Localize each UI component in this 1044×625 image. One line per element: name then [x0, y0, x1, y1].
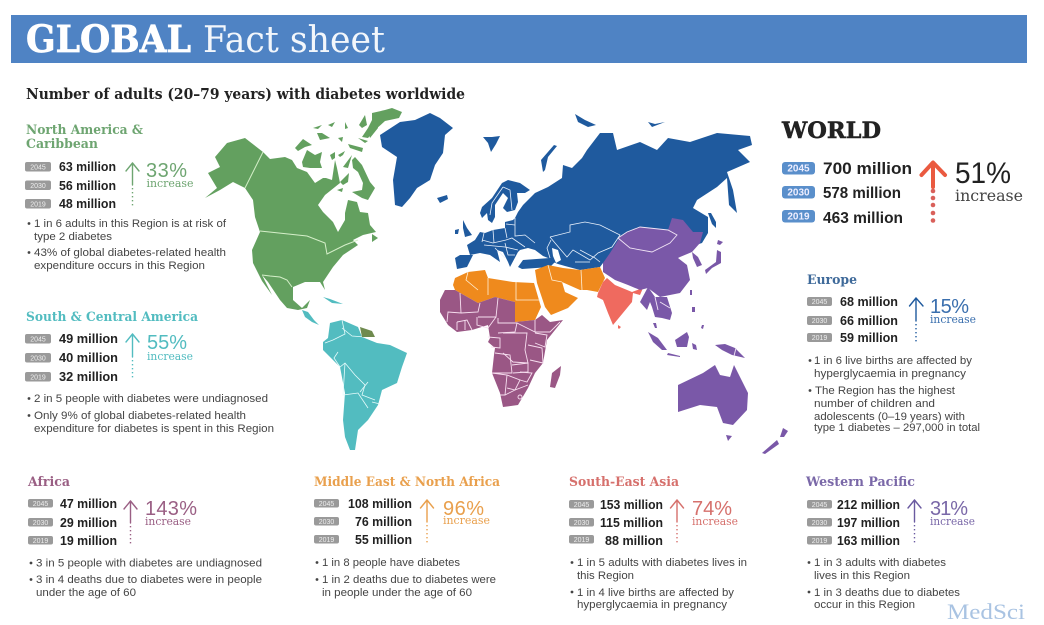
- increase: [930, 296, 976, 326]
- increase: increase: [147, 350, 193, 363]
- increase: 74%: [692, 498, 732, 520]
- bullets: 1 in 6 adults in this Region is at risk of: [34, 218, 227, 230]
- heading: North America &: [26, 123, 143, 138]
- panel: South-East Asia: [569, 475, 747, 611]
- map: Guianas: [360, 327, 375, 337]
- world map: [205, 108, 788, 454]
- bullets: occur in this Region: [814, 599, 915, 611]
- year rows: 163 million: [837, 533, 900, 548]
- increase: increase: [145, 515, 191, 528]
- bullets: [571, 557, 747, 611]
- bullets: 1 in 4 live births are affected by: [577, 587, 735, 599]
- year rows: 212 million: [837, 497, 900, 512]
- year rows: 2045: [33, 501, 48, 508]
- bullets: under the age of 60: [36, 587, 136, 599]
- map: Middle East and North Africa: [453, 265, 605, 322]
- bullets: 1 in 8 people have diabetes: [322, 557, 461, 569]
- map: South-East Asia region India: [597, 278, 643, 325]
- year rows: 40 million: [59, 350, 118, 365]
- panel: Middle East & North Africa: [314, 475, 501, 599]
- bullets: 43% of global diabetes-related health: [34, 247, 226, 259]
- arrow: [922, 162, 945, 223]
- bullets: 1 in 5 adults with diabetes lives in: [577, 557, 747, 569]
- year rows: 700 million: [823, 159, 912, 178]
- year rows: 2030: [319, 519, 334, 526]
- increase: [146, 160, 194, 190]
- panel: Africa: [27, 475, 262, 599]
- arrow: [670, 500, 684, 543]
- year rows: [314, 496, 412, 547]
- increase: increase: [692, 515, 738, 528]
- increase: [930, 498, 975, 528]
- bullets: in people under the age of 60: [322, 587, 472, 599]
- year rows: 2045: [574, 502, 589, 509]
- year rows: 49 million: [59, 331, 118, 346]
- year rows: 2019: [787, 212, 810, 222]
- bullets: 3 in 5 people with diabetes are undiagnosed: [36, 558, 262, 570]
- year rows: 2045: [319, 501, 334, 508]
- panel: North America & Caribbean: [25, 123, 227, 272]
- increase: [147, 332, 193, 363]
- increase: [692, 498, 738, 528]
- year rows: 2045: [30, 336, 46, 344]
- year rows: 2030: [574, 520, 589, 527]
- heading: [26, 123, 143, 152]
- bullets: lives in this Region: [814, 570, 910, 582]
- heading: Caribbean: [26, 137, 99, 152]
- increase: increase: [930, 313, 976, 326]
- subtitle: Number of adults (20–79 years) with diabetes worldwide: [26, 86, 465, 103]
- year rows: 88 million: [605, 533, 663, 548]
- arrow: [910, 298, 923, 342]
- bullets: [809, 355, 980, 434]
- arrow: [420, 500, 434, 543]
- bullets: expenditure for diabetes is spent in this Region: [34, 423, 274, 435]
- year rows: 2019: [30, 374, 46, 382]
- bullets: [316, 557, 496, 599]
- bullets: [28, 218, 227, 272]
- bullets: 1 in 6 live births are affected by: [814, 355, 973, 367]
- arrow: [908, 500, 921, 544]
- increase: 51%: [955, 157, 1011, 190]
- year rows: 2030: [33, 520, 48, 527]
- year rows: 48 million: [59, 196, 116, 211]
- year rows: 2030: [30, 183, 46, 190]
- bullets: 1 in 3 adults with diabetes: [814, 557, 947, 569]
- year rows: 463 million: [823, 210, 903, 227]
- year rows: 2045: [30, 164, 46, 172]
- heading: South-East Asia: [569, 475, 680, 490]
- increase: 15%: [930, 296, 969, 318]
- panel: South & Central America: [25, 310, 274, 435]
- year rows: 2030: [787, 188, 810, 198]
- bullets: expenditure occurs in this Region: [34, 260, 205, 272]
- year rows: 19 million: [60, 533, 117, 548]
- increase: increase: [443, 514, 490, 527]
- year rows: 56 million: [59, 178, 116, 193]
- bullets: hyperglycaemia in pregnancy: [577, 599, 728, 611]
- year rows: 153 million: [600, 497, 663, 512]
- heading: South & Central America: [26, 310, 199, 325]
- panel: WORLD totals: [781, 118, 1023, 227]
- year rows: 59 million: [840, 330, 898, 345]
- map: South and Central America: [302, 297, 407, 450]
- arrow: [126, 163, 139, 206]
- year rows: 2030: [30, 356, 46, 362]
- year rows: 66 million: [840, 313, 898, 328]
- year rows: 2019: [319, 537, 334, 544]
- header banner: Fact sheet: [203, 20, 386, 61]
- map: Western Sahara: [440, 290, 453, 300]
- heading: Middle East & North Africa: [314, 475, 501, 490]
- increase: increase: [930, 515, 975, 528]
- heading: WORLD: [781, 118, 881, 144]
- increase: 31%: [930, 498, 968, 520]
- header banner: GLOBAL: [26, 17, 191, 61]
- bullets: [808, 557, 961, 611]
- heading: Western Pacific: [805, 475, 915, 490]
- year rows: 2045: [787, 164, 810, 174]
- year rows: 47 million: [60, 496, 117, 511]
- increase: 96%: [443, 498, 484, 520]
- year rows: 2045: [812, 299, 827, 306]
- increase: 33%: [146, 160, 187, 182]
- year rows: 2019: [812, 538, 827, 545]
- bullets: type 2 diabetes: [34, 231, 113, 243]
- panel: Western Pacific: [805, 475, 975, 611]
- bullets: 1 in 3 deaths due to diabetes: [814, 587, 961, 599]
- year rows: 197 million: [837, 515, 900, 530]
- bullets: Only 9% of global diabetes-related health: [34, 410, 246, 422]
- bullets: 1 in 2 deaths due to diabetes were: [322, 574, 496, 586]
- bullets: number of children and: [814, 398, 935, 410]
- year rows: [25, 331, 118, 384]
- map: North America: [205, 108, 402, 310]
- bullets: adolescents (0–19 years) with: [814, 411, 965, 423]
- year rows: 76 million: [355, 514, 412, 529]
- year rows: 2030: [812, 318, 827, 325]
- map: Western Pacific: [603, 218, 788, 454]
- year rows: 29 million: [60, 515, 117, 530]
- bullets: this Region: [577, 570, 634, 582]
- year rows: 2019: [812, 335, 827, 342]
- bullets: The Region has the highest: [815, 385, 955, 397]
- year rows: 55 million: [355, 532, 412, 547]
- year rows: [569, 497, 663, 548]
- year rows: [807, 294, 898, 345]
- increase: increase: [955, 186, 1023, 205]
- year rows: 2019: [574, 537, 589, 544]
- map: Africa: [440, 290, 563, 407]
- heading: Europe: [807, 273, 857, 288]
- year rows: 63 million: [59, 159, 116, 174]
- watermark: MedSci: MedSci: [947, 599, 1025, 624]
- year rows: [782, 159, 912, 227]
- map: Caspian Sea: [552, 248, 561, 263]
- heading: Africa: [27, 475, 71, 490]
- year rows: 2030: [812, 520, 827, 527]
- bullets: [30, 558, 262, 599]
- map: Greenland and Europe/Russia: [380, 113, 752, 270]
- year rows: 578 million: [823, 185, 901, 202]
- panel: Europe: [807, 273, 980, 434]
- bullets: 3 in 4 deaths due to diabetes were in people: [36, 574, 262, 586]
- increase: [443, 498, 490, 527]
- year rows: 2019: [33, 538, 48, 545]
- bullets: hyperglycaemia in pregnancy: [814, 368, 967, 380]
- increase: 55%: [147, 332, 187, 354]
- year rows: 2045: [812, 502, 827, 509]
- increase: 143%: [145, 498, 197, 520]
- arrow: [126, 334, 139, 378]
- year rows: [25, 159, 116, 211]
- arrow: [124, 501, 137, 545]
- year rows: 32 million: [59, 369, 118, 384]
- increase: increase: [146, 177, 194, 190]
- increase: [955, 157, 1023, 205]
- year rows: 115 million: [600, 515, 663, 530]
- year rows: 2019: [30, 202, 46, 208]
- year rows: [28, 496, 117, 548]
- header banner: [11, 15, 1027, 63]
- bullets: [28, 393, 274, 435]
- bullets: type 1 diabetes – 297,000 in total: [814, 422, 980, 434]
- year rows: [807, 497, 900, 548]
- year rows: 68 million: [840, 294, 898, 309]
- year rows: 108 million: [348, 496, 412, 511]
- bullets: 2 in 5 people with diabetes were undiagnosed: [34, 393, 268, 405]
